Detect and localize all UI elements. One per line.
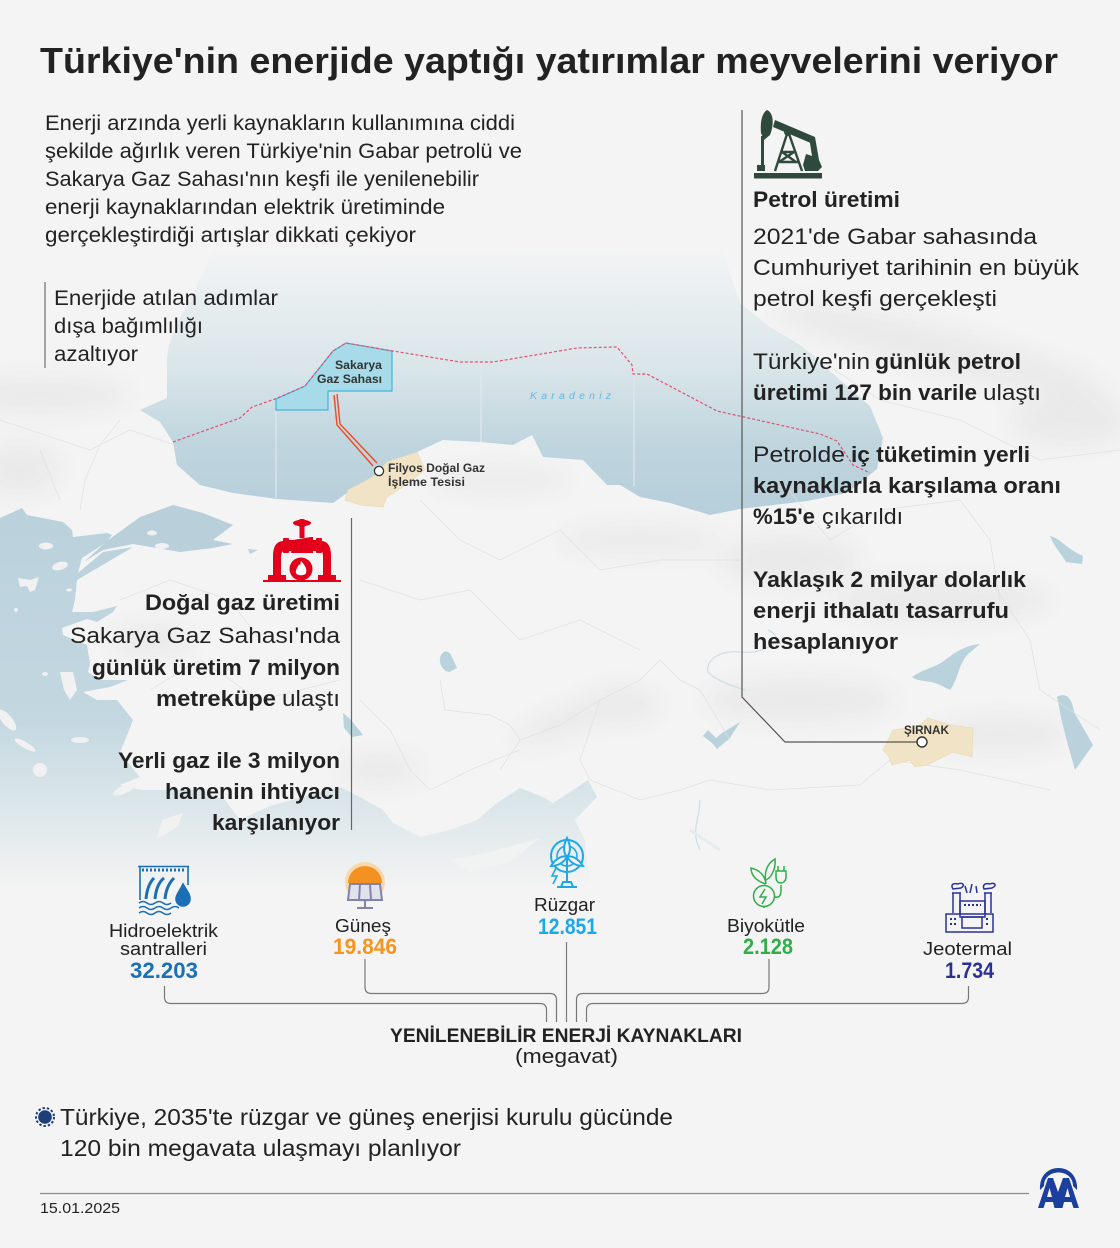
panel: oil production: %15'e [753,504,815,529]
Zonguldak province highlight [345,452,425,507]
icon: geothermal plant [946,883,995,932]
renewable energy: geothermal [923,883,1012,983]
map of Türkiye and surrounding seas [0,250,1120,890]
bottom note: Türkiye, 2035'te rüzgar ve güneş enerjisi kurulu gücünde [60,1104,673,1130]
renewable energy: solar [333,862,397,959]
panel: natural gas production: karşılanıyor [212,810,340,835]
renewable energy: biomass: 2.128 [743,934,793,959]
renewable energy heading: YENİLENEBİLİR ENERJİ KAYNAKLARI [390,1024,742,1047]
bottom note [36,1104,673,1161]
panel: oil production: günlük petrol [875,349,1021,374]
bottom note: 120 bin megavata ulaşmayı planlıyor [60,1135,461,1161]
Black Sea [140,250,883,515]
panel: oil production: Petrolde [753,442,845,467]
maritime boundary pale lines [276,362,634,498]
callout: reducing dependence: azaltıyor [54,343,138,366]
renewable energy: biomass: Biyokütle [727,915,805,936]
Cyprus [450,838,540,872]
panel: natural gas production: günlük üretim 7 milyon [92,655,340,680]
renewable energy: wind [534,838,597,939]
rivers and dam reservoirs [690,630,776,850]
panel: oil production: Petrol üretimi [753,187,900,212]
panel: oil production: petrol keşfi gerçekleşti [753,286,997,311]
icon: oil pump jack [754,110,822,178]
Sakarya gas field: Sakarya [335,358,382,372]
date: 15.01.2025 [40,1201,120,1217]
panel: oil production [742,110,1080,747]
connector brackets [164,942,968,1022]
intro paragraph: Enerji arzında yerli kaynakların kullanımına ciddi [45,112,515,135]
lakes [248,536,1093,770]
Sakarya gas field [276,343,392,410]
icon: sun and solar panel [345,862,385,908]
footer line [40,1192,1029,1194]
Aegean and Mediterranean seas [0,508,597,890]
renewable energy heading [390,1024,742,1068]
logo: AA [1038,1168,1079,1208]
renewable energy: hydro: santralleri [120,938,207,959]
renewable energy: wind: Rüzgar [534,894,595,915]
renewable energy: hydro: Hidroelektrik [109,920,219,941]
icon: wind turbine [551,838,583,887]
panel: oil production: çıkarıldı [822,504,903,529]
Sakarya gas field: Gaz Sahası [317,372,382,386]
intro paragraph [45,112,522,247]
renewable energy: solar: 19.846 [333,934,397,959]
title: Türkiye'nin enerjide yaptığı yatırımlar meyvelerini veriyor [40,40,1058,81]
maritime border dashed line [173,343,870,473]
renewable energy: geothermal: 1.734 [945,958,995,983]
renewable energy: geothermal: Jeotermal [923,938,1012,959]
renewable energy: hydro [109,866,219,983]
panel: oil production: Yaklaşık 2 milyar dolarlık [753,567,1026,592]
gas pipeline [334,394,377,466]
Şırnak label: ŞIRNAK [904,723,949,737]
intro paragraph: Sakarya Gaz Sahası'nın keşfi ile yenilenebilir [45,168,479,191]
callout: reducing dependence [44,282,278,368]
callout: reducing dependence: dışa bağımlılığı [54,315,203,338]
Filyos facility marker and label [374,461,485,489]
renewable energy heading: (megavat) [515,1046,618,1068]
panel: oil production: Türkiye'nin [753,349,870,374]
Filyos facility marker and label: İşleme Tesisi [388,474,465,489]
sea label: Karadeniz [530,390,612,402]
province and border lines [0,340,1120,800]
Sea of Marmara [84,505,233,562]
Şırnak province highlight [883,718,973,767]
callout: reducing dependence: Enerjide atılan adımlar [54,287,278,310]
panel: natural gas production: metreküpe [156,686,276,711]
intro paragraph: gerçekleştirdiği artışlar dikkati çekiyor [45,224,416,247]
Aegean and Marmara islands [0,530,183,838]
intro paragraph: enerji kaynaklarından elektrik üretiminde [45,196,445,219]
panel: oil production: ulaştı [983,380,1041,405]
renewable energy: biomass [727,859,805,959]
panel: oil production: Cumhuriyet tarihinin en büyük [753,255,1080,280]
icon: sun bullet [36,1108,54,1126]
renewable energy: wind: 12.851 [538,914,597,939]
panel: natural gas production: Doğal gaz üretimi [145,590,340,615]
panel: oil production: kaynaklarla karşılama oranı [753,473,1061,498]
panel: natural gas production [70,518,352,835]
panel: oil production: hesaplanıyor [753,629,898,654]
Filyos facility marker and label: Filyos Doğal Gaz [388,461,485,475]
panel: oil production: iç tüketimin yerli [851,442,1030,467]
panel: natural gas production: ulaştı [282,686,340,711]
panel: natural gas production: Sakarya Gaz Sahası'nda [70,623,341,648]
intro paragraph: şekilde ağırlık veren Türkiye'nin Gabar petrolü ve [45,140,522,163]
panel: oil production: enerji ithalatı tasarrufu [753,598,1009,623]
panel: oil production: 2021'de Gabar sahasında [753,224,1038,249]
icon: gas valve with flame [263,519,341,582]
icon: hydroelectric dam [138,866,190,914]
icon: leaf and plug [751,859,786,908]
panel: oil production: üretimi 127 bin varile [753,380,977,405]
panel: natural gas production: hanenin ihtiyacı [165,779,340,804]
renewable energy: hydro: 32.203 [130,958,198,983]
land relief shading [0,288,1120,786]
renewable energy: solar: Güneş [335,915,391,936]
panel: natural gas production: Yerli gaz ile 3 milyon [118,748,340,773]
